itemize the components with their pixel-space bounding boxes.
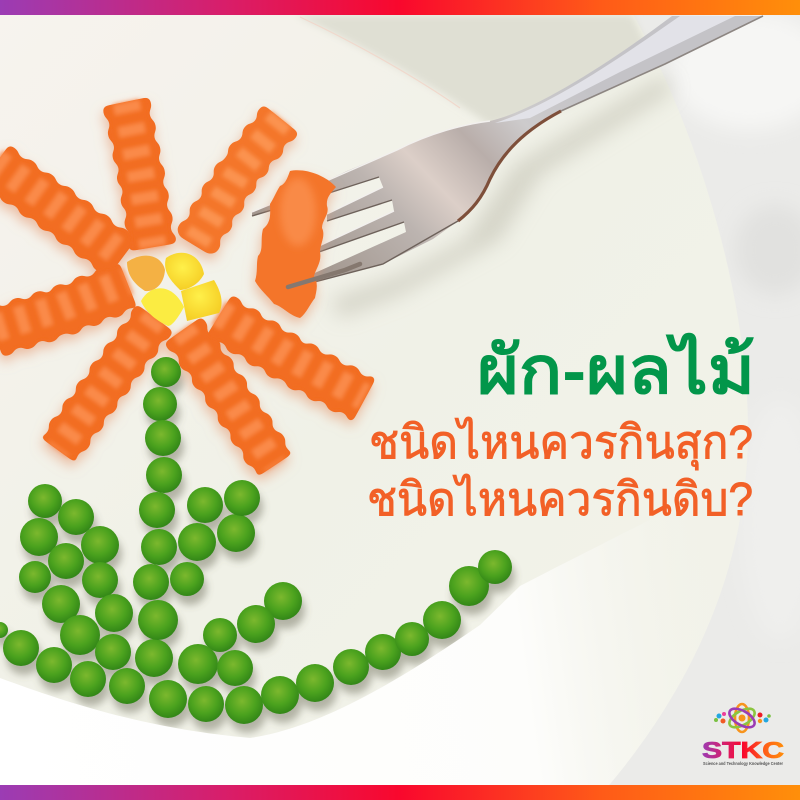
peas <box>0 357 512 724</box>
heading: vegetables and fruits: ผัก-ผลไม้ <box>477 332 755 407</box>
STKC logo <box>702 704 784 766</box>
corn: right kernel <box>181 280 222 321</box>
carrot: on fork <box>255 170 336 318</box>
corn kernels <box>127 253 222 326</box>
top gradient bar <box>0 0 800 15</box>
copper reflection <box>458 111 561 221</box>
carrot: top <box>126 102 153 247</box>
fork <box>252 16 763 289</box>
plate lower highlight <box>0 430 748 790</box>
title <box>367 332 755 525</box>
bottom gradient bar <box>0 785 800 800</box>
tine dark edges <box>252 177 458 289</box>
logo: atom icon <box>714 704 771 732</box>
handle lower dark edge <box>561 16 763 111</box>
logo: STKC wordmark: STKC <box>702 737 784 763</box>
carrot: upper left <box>0 162 122 258</box>
carrot: lower right <box>183 330 275 465</box>
fork body with tines <box>252 16 763 289</box>
napkin shading <box>670 10 800 640</box>
carrot flower <box>0 102 364 465</box>
fork tine over carrot <box>288 264 360 287</box>
plate rim highlight line <box>300 17 460 108</box>
carrot: upper right <box>194 119 281 245</box>
carrot: lower left <box>58 318 155 450</box>
corn: orange kernel <box>127 256 165 291</box>
subtitle: which should be eaten raw: ชนิดไหนควรกินดิบ? <box>367 473 753 525</box>
logo: tagline: Science and Technology Knowledge Center <box>703 761 783 766</box>
corn: top kernel <box>165 253 204 290</box>
carrot highlight on fork <box>280 178 316 246</box>
plate rim shade <box>295 15 655 125</box>
handle highlight <box>495 16 735 123</box>
subtitle: which should be eaten cooked: ชนิดไหนควรกินสุก? <box>369 416 753 471</box>
corn: left kernel <box>141 288 184 326</box>
tine light edges <box>252 121 490 246</box>
carrot: right <box>219 313 364 400</box>
pea shadows <box>0 357 512 724</box>
carrot: left <box>0 281 128 332</box>
fork shadow <box>330 75 672 318</box>
